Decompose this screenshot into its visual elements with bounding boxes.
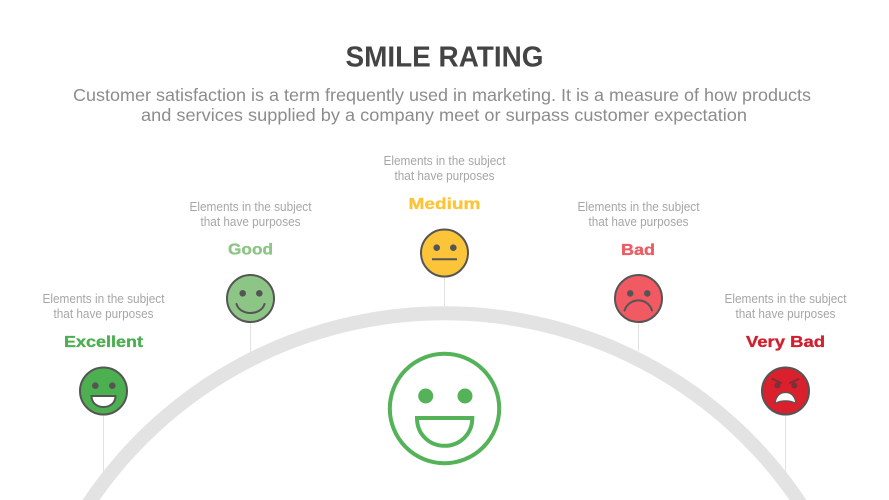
- rating: medium: Elements in the subject: [384, 154, 506, 168]
- rating: very bad: Elements in the subject: [724, 292, 847, 306]
- rating: excellent: [42, 292, 165, 472]
- rating: medium: [384, 154, 506, 306]
- rating: medium: Medium: [408, 196, 480, 213]
- rating: excellent: Elements in the subject: [42, 292, 165, 306]
- icon: large smiling face: [390, 354, 499, 463]
- rating: good: Good: [228, 242, 273, 258]
- rating: excellent: Excellent: [64, 334, 144, 351]
- rating: very bad: that have purposes: [736, 307, 836, 321]
- rating: medium: that have purposes: [394, 169, 494, 183]
- subtitle: Customer satisfaction is a term frequently used in marketing. It is a measure of how products: [73, 85, 811, 105]
- rating: very bad: Very Bad: [746, 334, 825, 351]
- icon: excellent face: [80, 368, 127, 414]
- subtitle: [73, 85, 811, 125]
- icon: very bad face: [762, 368, 809, 414]
- rating: good: [190, 200, 312, 352]
- rating: good: Elements in the subject: [190, 200, 312, 214]
- icon: medium face: [421, 230, 468, 276]
- icon: bad face: [615, 275, 662, 322]
- rating: very bad: [724, 292, 847, 472]
- icon: good face: [227, 275, 274, 322]
- large grey arc: [82, 306, 806, 500]
- subtitle: and services supplied by a company meet or surpass customer expectation: [141, 105, 747, 125]
- rating: excellent: that have purposes: [54, 307, 154, 321]
- title: SMILE RATING: [346, 42, 544, 74]
- rating: bad: that have purposes: [588, 215, 688, 229]
- rating: bad: Bad: [621, 242, 655, 259]
- rating: bad: [578, 200, 700, 351]
- rating: bad: Elements in the subject: [578, 200, 700, 214]
- rating: good: that have purposes: [200, 215, 300, 229]
